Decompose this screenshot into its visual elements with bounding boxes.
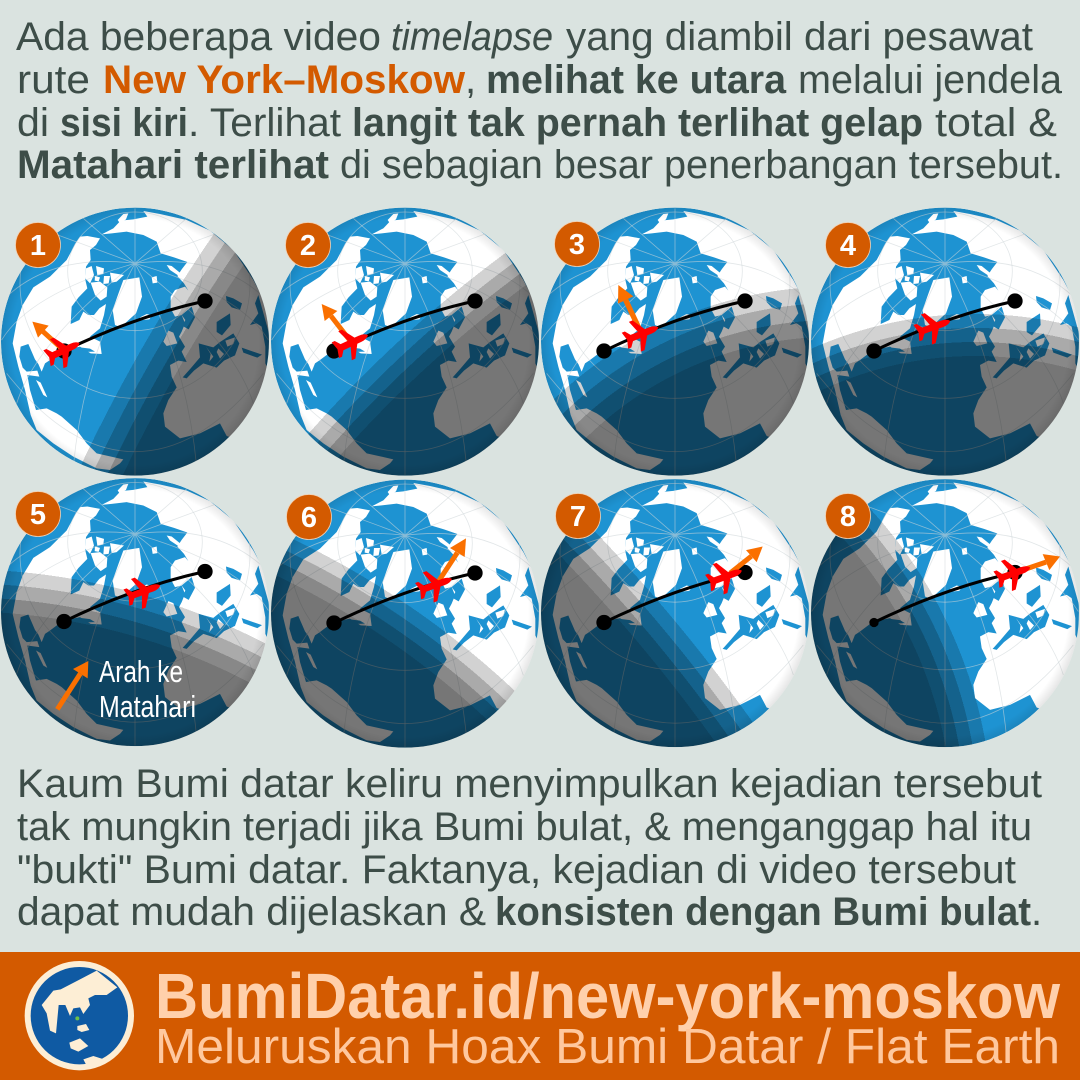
label: direction to the Sun [99,654,196,724]
badge 4: 4 [840,230,856,262]
badge 2 [286,222,330,268]
badge 7: 7 [570,501,586,533]
badge 5: 5 [30,499,46,531]
badge 5 [16,492,60,536]
badge 8 [826,494,870,538]
badge 6 [286,494,332,540]
conclusion text block: "bukti" Bumi datar. Faktanya, kejadian di video tersebut [17,848,1016,892]
intro text block: . Terlihat [188,101,341,145]
intro text block: langit tak pernah terlihat gelap [352,101,923,145]
globe 4 [811,208,1079,476]
intro text block: di sebagian besar penerbangan tersebut. [340,143,1063,187]
intro text block: total & [935,101,1057,145]
intro text block [16,15,1063,187]
intro text block: melihat ke utara [486,58,787,102]
intro text block: Matahari terlihat [17,143,329,187]
badge 3 [554,222,600,266]
conclusion text block [17,762,1042,934]
intro text block: sisi kiri [60,101,188,145]
intro text block: Ada beberapa video [16,15,381,59]
intro text block: , [465,58,476,102]
conclusion text block: Kaum Bumi datar keliru menyimpulkan kejadian tersebut [17,762,1042,806]
badge 7 [556,494,600,538]
arrow: direction to the Sun [57,661,88,709]
conclusion text block: . [1031,890,1042,934]
conclusion text block: konsisten dengan Bumi bulat [495,890,1031,934]
intro text block: timelapse [391,15,553,59]
intro text block: rute [17,58,90,102]
badge 3: 3 [569,229,585,261]
globe 5 [1,478,269,746]
intro text block: di [17,101,49,145]
globe 6 [271,480,539,748]
label: direction to the Sun: Matahari [99,689,196,724]
label: direction to the Sun: Arah ke [99,654,183,689]
badge 2: 2 [300,230,316,262]
intro text block: melalui jendela [798,58,1063,102]
footer subtitle: Meluruskan Hoax Bumi Datar / Flat Earth [155,1020,1060,1074]
intro text block: New York–Moskow [103,58,466,102]
globe 2 [271,208,539,476]
intro text block: yang diambil dari pesawat [566,15,1033,59]
globe 3 [541,208,809,476]
footer band [0,952,1080,1080]
badge 8: 8 [840,501,856,533]
badge 6: 6 [301,502,317,534]
conclusion text block: tak mungkin terjadi jika Bumi bulat, & menganggap hal itu [17,805,1032,849]
badge 1 [16,222,60,268]
badge 4 [826,222,870,268]
globe 1 [1,208,269,476]
badge 1: 1 [30,230,46,262]
conclusion text block: dapat mudah dijelaskan & [17,890,486,934]
globe 7 [541,479,809,748]
footer logo: globe [25,961,134,1070]
globe 8 [811,479,1079,748]
